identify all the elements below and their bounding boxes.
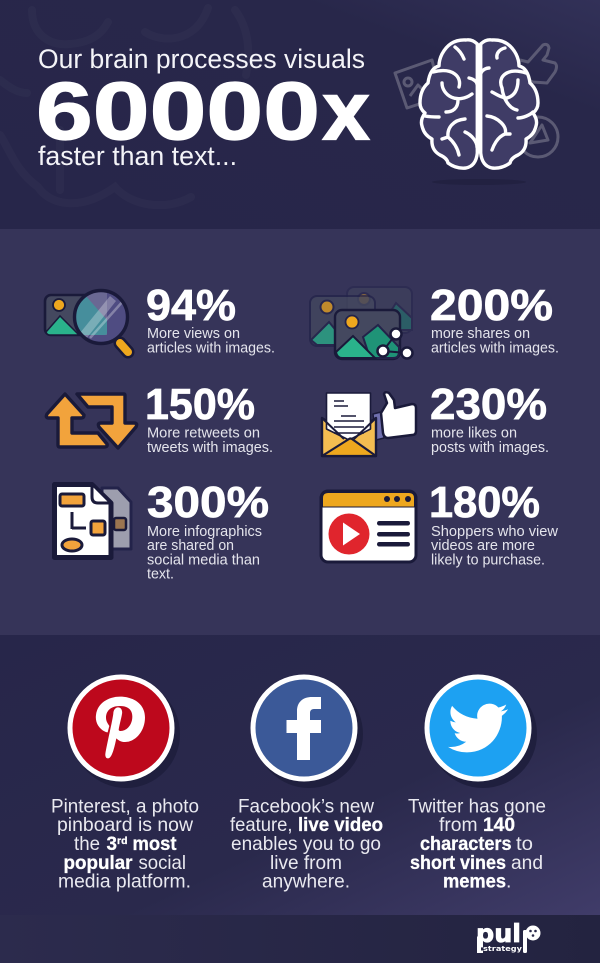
description: tweets with images. <box>147 440 273 456</box>
icon: brain <box>420 40 538 168</box>
caption: live video <box>298 814 383 836</box>
value: 150% <box>145 380 255 429</box>
caption: 140 <box>483 814 515 836</box>
caption: short vines <box>410 852 506 874</box>
description: text. <box>147 566 174 582</box>
caption: 3 <box>106 833 117 855</box>
description: More retweets on <box>147 426 260 442</box>
description: are shared on <box>147 538 234 554</box>
caption: live from <box>270 852 342 874</box>
value: 180% <box>429 478 540 527</box>
description: more likes on <box>431 426 517 442</box>
heading line 1: Our brain processes visuals <box>38 44 365 74</box>
logo: pulp strategy <box>476 919 540 953</box>
caption: and <box>511 852 543 874</box>
icon: shared images <box>310 287 412 359</box>
panel: footer <box>0 915 600 963</box>
icon: envelope and thumbs up <box>322 392 416 456</box>
stat: 180% <box>321 478 559 568</box>
stat: 200% <box>310 281 559 359</box>
panel: social media <box>0 635 600 915</box>
brain shadow <box>432 179 526 185</box>
icon: magnifier over photo <box>45 288 128 352</box>
icon: video player window <box>321 491 416 562</box>
description <box>431 426 549 456</box>
stat: 94% <box>45 281 275 356</box>
description: More views on <box>147 326 240 342</box>
stat: 150% <box>46 380 273 456</box>
heading line 3: faster than text... <box>38 141 237 171</box>
caption: media platform. <box>58 870 191 892</box>
caption: to <box>516 833 533 855</box>
caption: most <box>132 833 177 855</box>
description <box>431 524 559 568</box>
caption <box>408 796 546 892</box>
caption: enables you to go <box>231 833 381 855</box>
icon: grey thumb behind brain <box>518 44 556 83</box>
description <box>431 326 559 356</box>
caption: characters <box>420 833 512 855</box>
description <box>147 326 275 356</box>
caption: social <box>138 852 186 874</box>
column: Facebook <box>230 677 383 892</box>
icon: grey photo behind brain <box>395 60 441 108</box>
stat: 230% <box>322 380 549 456</box>
description: likely to purchase. <box>431 552 545 568</box>
icon: Pinterest badge <box>70 677 180 788</box>
caption: Facebook’s new <box>238 796 375 818</box>
icon: retweet arrows <box>46 394 137 448</box>
caption: memes <box>443 870 506 892</box>
caption: from <box>439 814 478 836</box>
faint background brain <box>0 8 248 205</box>
panel: statistics <box>44 286 558 578</box>
stat: 300% <box>54 478 269 582</box>
caption: . <box>506 870 511 892</box>
icon: grey circle with triangle behind brain <box>518 117 558 157</box>
value: 300% <box>147 478 269 527</box>
headline number: 60000 <box>36 66 320 157</box>
headline number <box>36 66 369 157</box>
caption: the <box>74 833 100 855</box>
caption: pinboard is now <box>57 814 194 836</box>
description: More infographics <box>147 524 262 540</box>
description: articles with images. <box>431 340 559 356</box>
icon: Facebook badge <box>253 677 363 788</box>
value: 94% <box>146 281 236 330</box>
description: social media than <box>147 552 260 568</box>
headline number: x <box>323 66 369 157</box>
column: Pinterest <box>51 677 199 892</box>
column: Twitter <box>408 677 546 892</box>
description <box>147 524 262 582</box>
icon: Twitter badge <box>427 677 537 788</box>
description: videos are more <box>431 538 535 554</box>
description: posts with images. <box>431 440 549 456</box>
caption: feature, <box>230 814 292 836</box>
caption <box>51 796 199 892</box>
description: Shoppers who view <box>431 524 559 540</box>
description: more shares on <box>431 326 530 342</box>
caption: rd <box>117 836 128 847</box>
logo: pulp strategy: strategy <box>483 945 523 953</box>
panel: header <box>0 0 600 229</box>
caption: Twitter has gone <box>408 796 546 818</box>
logo: pulp strategy: pul <box>476 919 521 948</box>
value: 230% <box>430 380 547 429</box>
icon: flowchart documents <box>54 484 131 558</box>
caption <box>230 796 383 892</box>
description: articles with images. <box>147 340 275 356</box>
description <box>147 426 273 456</box>
caption: popular <box>64 852 133 874</box>
value: 200% <box>430 281 553 330</box>
caption: Pinterest, a photo <box>51 796 199 818</box>
caption: anywhere. <box>262 870 350 892</box>
